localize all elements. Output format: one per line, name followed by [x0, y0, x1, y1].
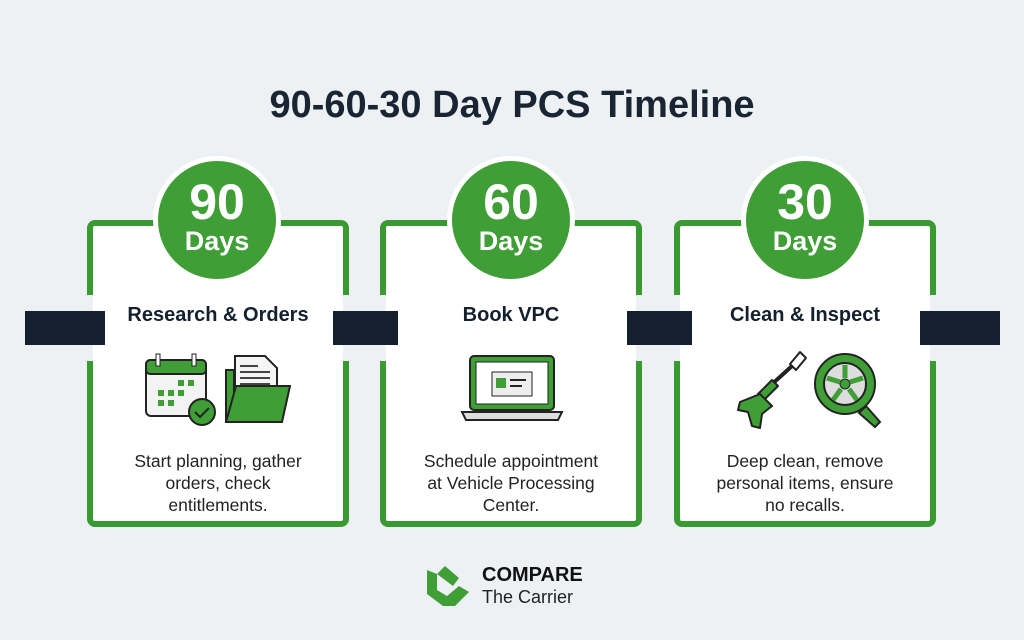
- badge: 30 days: Days: [773, 226, 837, 256]
- badge: 90 days: [153, 156, 281, 284]
- heading: research: Research & Orders: [127, 304, 309, 326]
- panel: 90 days: [87, 220, 349, 527]
- badge: 60 days: 60: [483, 174, 539, 230]
- text: 60 days: Schedule appointment: [424, 451, 598, 471]
- text: 60 days: Center.: [483, 495, 539, 515]
- bar segments at card edges: [25, 311, 105, 345]
- badge: 30 days: [741, 156, 869, 284]
- badge: 60 days: Days: [479, 226, 543, 256]
- text: 30 days: no recalls.: [765, 495, 845, 515]
- text: 90 days: entitlements.: [168, 495, 268, 515]
- text: 90 days: Start planning, gather: [134, 451, 302, 471]
- text: 30 days: personal items, ensure: [716, 473, 894, 493]
- heading: clean: Clean & Inspect: [730, 304, 880, 326]
- text: 60 days: [424, 451, 598, 515]
- heading: book vpc: Book VPC: [463, 304, 559, 326]
- text: 30 days: Deep clean, remove: [727, 451, 883, 471]
- title: 90-60-30 Day PCS Timeline: [269, 84, 755, 126]
- icon: calendar and folder: [145, 354, 292, 426]
- logo: [427, 564, 583, 607]
- logo: COMPARE: [482, 564, 583, 586]
- panel: 60 days: [380, 220, 642, 527]
- logo: The Carrier: [482, 587, 573, 607]
- text: 90 days: orders, check: [165, 473, 271, 493]
- text: 90 days: [134, 451, 302, 515]
- badge: 90 days: 90: [189, 174, 245, 230]
- icon: laptop: [460, 355, 564, 421]
- badge: 60 days: [447, 156, 575, 284]
- text: 60 days: at Vehicle Processing: [427, 473, 595, 493]
- icon: pressure washer and wheel magnifier: [737, 351, 882, 429]
- panel: 30 days: [674, 220, 936, 527]
- icon: logo mark: [427, 566, 469, 606]
- timeline bar: [25, 311, 1000, 345]
- badge: 30 days: 30: [777, 174, 833, 230]
- text: 30 days: [716, 451, 894, 515]
- badge: 90 days: Days: [185, 226, 249, 256]
